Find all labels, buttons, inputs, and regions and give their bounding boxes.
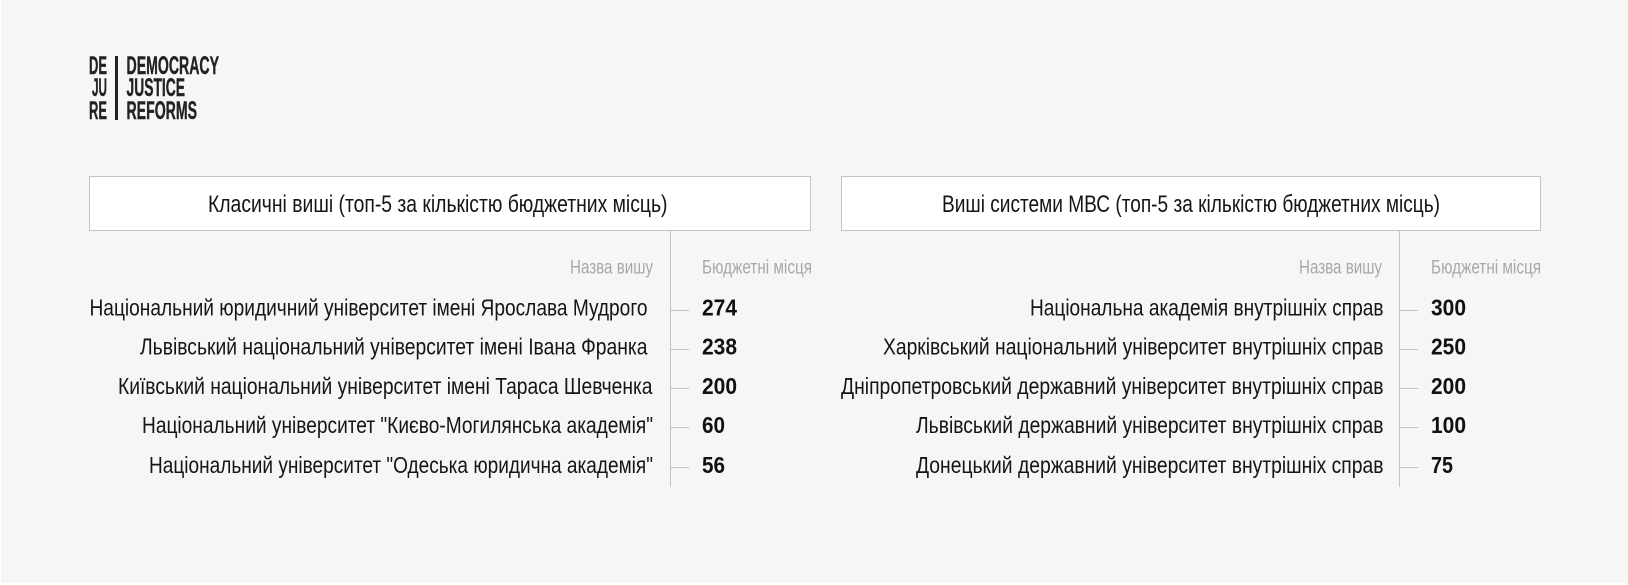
heading: classic universities: Класичні виші (топ-5 за кількістю бюджетних місць) (208, 191, 668, 218)
row 3: 200 (702, 373, 737, 399)
logo: De Jure: DE (89, 52, 107, 80)
axis line (1399, 231, 1400, 487)
row 5: Національний університет "Одеська юридична академія" (149, 452, 653, 478)
row 1: Національний юридичний університет імені Ярослава Мудрого (90, 294, 648, 320)
heading: classic universities (90, 176, 810, 230)
row 3: Дніпропетровський державний університет внутрішніх справ (841, 373, 1384, 399)
column header: budget places: Бюджетні місця (702, 258, 812, 278)
logo: De Jure: JU (92, 74, 107, 102)
logo: De Jure (89, 52, 219, 125)
panel: interior ministry universities (841, 176, 1541, 487)
row 1: 300 (1431, 294, 1466, 320)
column header: name: Назва вишу (1299, 258, 1382, 278)
axis line (670, 231, 671, 487)
column header: name: Назва вишу (570, 258, 653, 278)
row 2: 250 (1431, 334, 1466, 360)
row 4: Національний університет "Києво-Могилянська академія" (142, 412, 653, 438)
row 2: Львівський національний університет імені Івана Франка (140, 334, 648, 360)
row 1: 274 (702, 294, 737, 320)
row 3: 200 (1431, 373, 1466, 399)
column header: budget places: Бюджетні місця (1431, 258, 1541, 278)
logo: De Jure: JUSTICE (126, 74, 185, 102)
row 2: 238 (702, 334, 737, 360)
logo: De Jure: REFORMS (126, 97, 197, 125)
heading: interior ministry universities (842, 176, 1540, 230)
logo: De Jure: RE (89, 97, 107, 125)
row 3: Київський національний університет імені Тараса Шевченка (118, 373, 653, 399)
row 1: Національна академія внутрішніх справ (1030, 294, 1384, 320)
row 5: 75 (1431, 452, 1453, 478)
row 5: Донецький державний університет внутрішніх справ (916, 452, 1384, 478)
row 5: 56 (702, 452, 725, 478)
row 2: Харківський національний університет внутрішніх справ (883, 334, 1384, 360)
panel: classic universities (90, 176, 812, 487)
row 4: 60 (702, 412, 725, 438)
logo: De Jure: DEMOCRACY (126, 52, 219, 80)
heading: interior ministry universities: Виші системи МВС (топ-5 за кількістю бюджетних місць) (942, 191, 1440, 218)
row 4: 100 (1431, 412, 1466, 438)
row 4: Львівський державний університет внутрішніх справ (916, 412, 1384, 438)
